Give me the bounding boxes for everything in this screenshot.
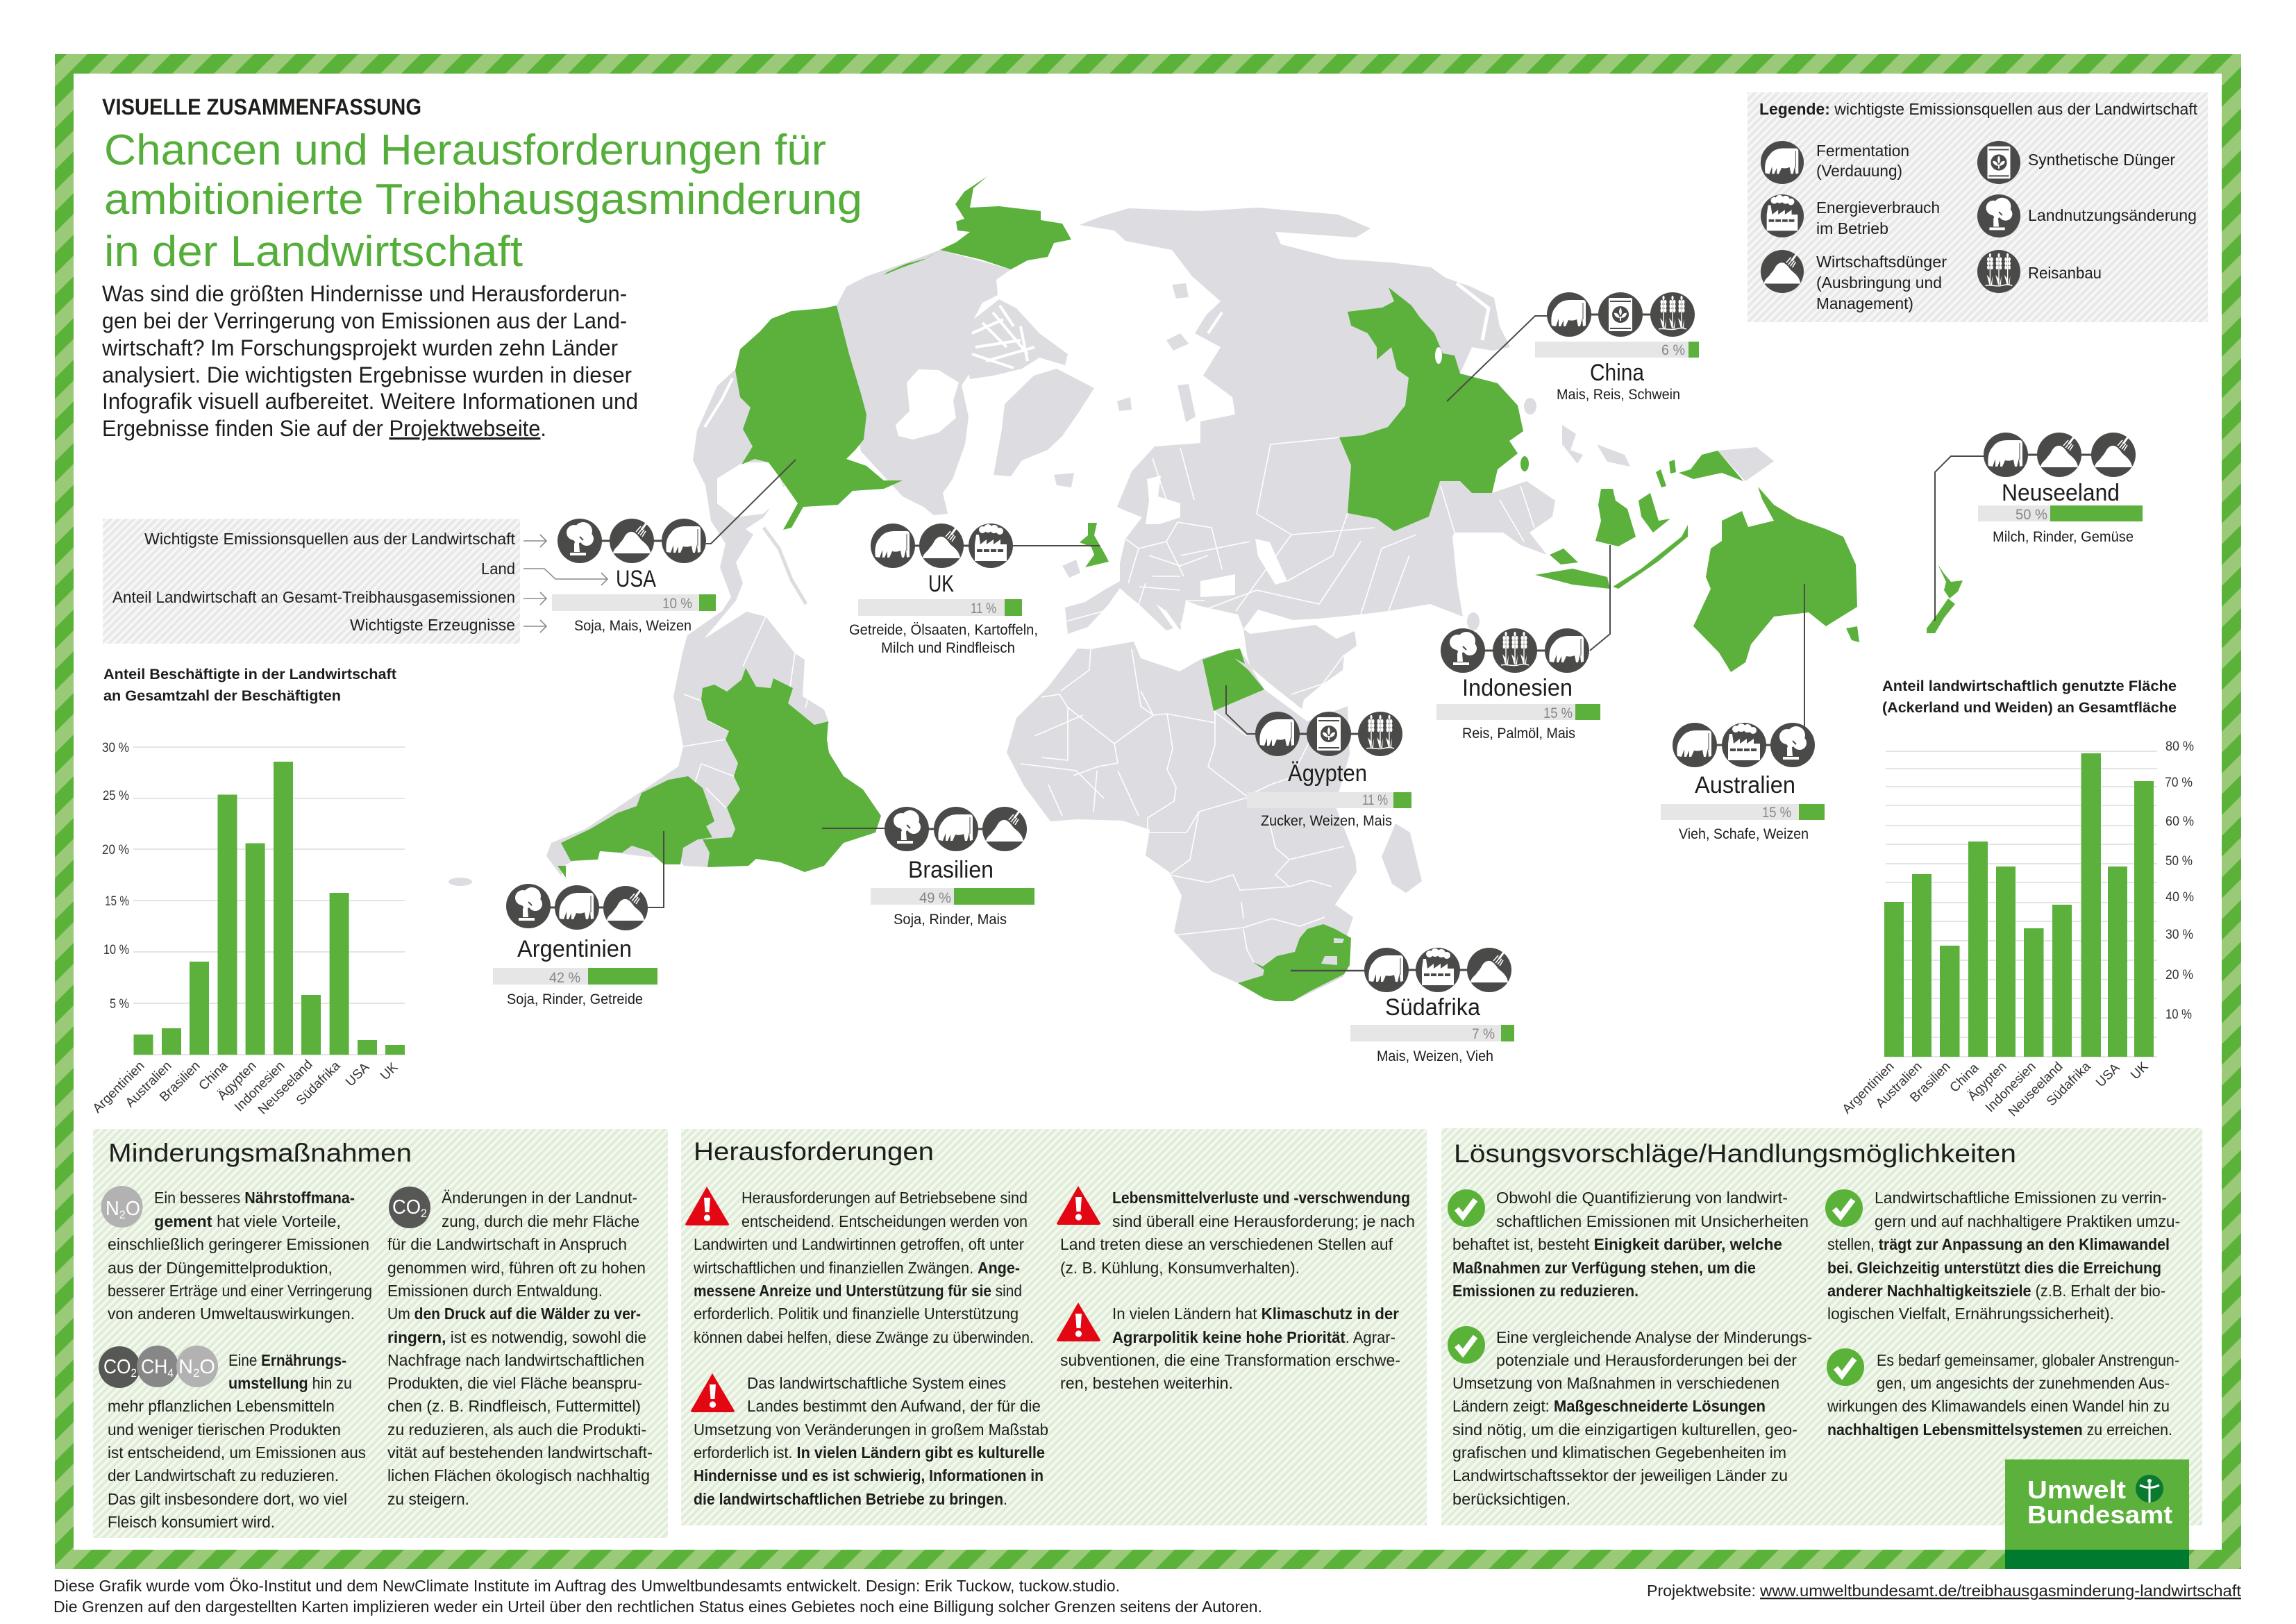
share bar: Ägypten: 11 % <box>1362 792 1388 808</box>
text block: vergleichende Analyse: Umsetzung von Maßnahmen in verschiedenen <box>1452 1374 1779 1392</box>
icon row: Neuseeland <box>1984 433 2136 477</box>
text block: Landnutzung: chen (z. B. Rindfleisch, Futtermittel) <box>387 1397 641 1415</box>
x axis labels: Südafrika <box>294 1058 344 1108</box>
text block: globale Anstrengungen <box>1827 1351 2179 1439</box>
icon: CO2 CH4 N2O <box>99 1346 218 1388</box>
y axis labels: 20 % <box>102 843 129 857</box>
icon: CO2 CH4 N2O: 2 <box>131 1366 137 1380</box>
icon: CO2: 2 <box>421 1207 427 1220</box>
y axis labels <box>2165 739 2194 1022</box>
intro text <box>101 281 638 441</box>
text block: Quantifizierung: Maßnahmen zur Verfügung stehen, um die <box>1452 1259 1756 1277</box>
label: land use change: Landnutzungsänderung <box>2028 206 2197 224</box>
heading: Visuelle Zusammenfassung: VISUELLE ZUSAMMENFASSUNG <box>102 94 421 119</box>
text block: landwirtschaftliches System: Umsetzung von Veränderungen in großem Maßstab <box>694 1421 1048 1439</box>
country: China <box>1339 287 1523 531</box>
label: energy use: im Betrieb <box>1816 219 1888 237</box>
intro text: Infografik visuell aufbereitet. Weitere Informationen und <box>102 389 638 414</box>
text block: landwirtschaftliches System: die landwirtschaftlichen Betriebe zu bringen. <box>694 1490 1007 1508</box>
share bar: Argentinien: 42 % <box>549 969 580 986</box>
text block: Klimaschutz: In vielen Ländern hat Klimaschutz in der <box>1112 1305 1399 1323</box>
text block: Nährstoffmanagement: einschließlich geringerer Emissionen <box>108 1235 369 1253</box>
text block: Betriebsebene <box>693 1189 1034 1346</box>
bars <box>1884 753 2154 1057</box>
text block: nachhaltigere Praktiken: Landwirtschaftliche Emissionen zu verrin- <box>1875 1189 2167 1207</box>
share bar: Brasilien: 49 % <box>919 889 951 906</box>
share bar: Australien <box>1661 804 1825 821</box>
icon row: Ägypten <box>1255 712 1402 756</box>
connector: Brasilien <box>822 828 889 829</box>
y axis labels: 10 % <box>2165 1007 2192 1022</box>
text block: Landnutzung: Emissionen durch Entwaldung. <box>387 1282 603 1300</box>
text block: Klimaschutz <box>1060 1305 1400 1392</box>
connector: Australien <box>1804 584 1805 728</box>
map: country borders and fine cuts <box>683 283 1534 962</box>
x axis labels: Brasilien <box>157 1059 203 1105</box>
share bar: China <box>1535 342 1699 358</box>
y axis labels <box>102 741 129 1012</box>
intro text: analysiert. Die wichtigsten Ergebnisse wurden in dieser <box>102 362 632 387</box>
logo emblem <box>2136 1475 2163 1502</box>
x axis labels: Argentinien <box>1840 1060 1897 1117</box>
country name: USA: USA <box>616 566 656 592</box>
x axis labels: China <box>1947 1060 1982 1096</box>
x axis labels: Neuseeland <box>255 1057 316 1117</box>
y axis labels: 60 % <box>2165 814 2194 829</box>
y axis labels: 10 % <box>103 943 129 957</box>
y axis labels: 30 % <box>2165 928 2193 942</box>
label: energy use: Energieverbrauch <box>1816 199 1940 217</box>
text block: Landnutzung: zung, durch die mehr Fläche <box>442 1212 639 1230</box>
text block: Landnutzung: ringern, ist es notwendig, sowohl die <box>387 1328 646 1346</box>
connector: China <box>1447 316 1548 401</box>
text block: Nährstoffmanagement: Ein besseres Nährstoffmana- <box>154 1189 355 1207</box>
products: Ägypten: Zucker, Weizen, Mais <box>1261 812 1392 829</box>
callout: UK <box>849 524 1100 656</box>
country name: UK: UK <box>928 571 954 597</box>
icon: check <box>1448 1189 1485 1227</box>
y axis labels: 50 % <box>2165 854 2193 869</box>
logo: Umweltbundesamt: Bundesamt <box>2027 1500 2172 1529</box>
icon: check <box>1448 1326 1485 1364</box>
icon: warning <box>1057 1186 1100 1225</box>
label: energy use <box>1816 199 1940 237</box>
text block: Lebensmittelverluste <box>1060 1189 1415 1277</box>
callout: USA <box>552 460 796 634</box>
icon: CO2: CO <box>392 1196 422 1219</box>
label: fermentation <box>1816 142 1909 180</box>
text block: Nährstoffmanagement: besserer Erträge und einer Verringerung <box>108 1282 372 1300</box>
icon row: Indonesien <box>1441 628 1589 673</box>
text block: Landnutzung: Änderungen in der Landnut- <box>442 1189 637 1207</box>
panel: legend <box>1748 92 2208 322</box>
map: enclaves and small inland water <box>1321 938 1344 965</box>
products: Argentinien: Soja, Rinder, Getreide <box>507 991 643 1007</box>
text block: Lebensmittelverluste: sind überall eine Herausforderung; je nach <box>1112 1212 1415 1230</box>
icon: check <box>1827 1348 1864 1386</box>
country: Brasilien <box>701 668 881 872</box>
icon: warning <box>1057 1303 1100 1341</box>
country name: Ägypten: Ägypten <box>1288 760 1367 787</box>
panel: Lösungsvorschläge <box>1441 1128 2202 1525</box>
icon: CO2 CH4 N2O: 4 <box>167 1366 174 1380</box>
y axis labels: 20 % <box>2165 968 2193 982</box>
connector: Südafrika <box>1291 970 1366 971</box>
logo: Umweltbundesamt: Umwelt <box>2027 1475 2126 1504</box>
key labels: Wichtigste Emissionsquellen aus der Landwirtschaft <box>144 530 516 548</box>
x axis labels: Südafrika <box>2044 1059 2094 1109</box>
icon: check <box>1825 1189 1863 1227</box>
panel heading: Herausforderungen <box>694 1137 934 1166</box>
country: UK <box>1080 523 1109 567</box>
chart title: employment share: an Gesamtzahl der Beschäftigten <box>103 687 341 704</box>
title: Chancen und Herausforderungen für <box>104 126 826 174</box>
map: highlighted countries <box>558 176 1963 1001</box>
x axis labels: UK <box>378 1060 401 1083</box>
text block: vergleichende Analyse: Ländern zeigt: Maßgeschneiderte Lösungen <box>1452 1397 1766 1415</box>
logo: Umweltbundesamt <box>2005 1459 2189 1569</box>
products: Australien: Vieh, Schafe, Weizen <box>1679 826 1809 842</box>
text block: Nährstoffmanagement: aus der Düngemittelproduktion, <box>108 1259 333 1277</box>
intro text: gen bei der Verringerung von Emissionen aus der Land- <box>102 308 627 333</box>
text block: Klimaschutz: Agrarpolitik keine hohe Priorität. Agrar- <box>1112 1328 1396 1346</box>
callout: Südafrika <box>1291 948 1514 1064</box>
icon: N2O: 2 <box>119 1208 126 1221</box>
share bar: Indonesien: 15 % <box>1543 705 1573 721</box>
callout: Ägypten <box>1226 685 1411 829</box>
y axis labels: 25 % <box>103 789 129 803</box>
callout: China <box>1447 292 1699 403</box>
x axis labels <box>1840 1059 2152 1119</box>
text block: Lebensmittelverluste: Land treten diese an verschiedenen Stellen auf <box>1060 1235 1393 1253</box>
products: UK: Milch und Rindfleisch <box>881 639 1015 656</box>
country: Argentinien <box>558 776 714 878</box>
icon row: Südafrika <box>1364 948 1511 992</box>
footer: credits: Diese Grafik wurde vom Öko-Institut und dem NewClimate Institute im Auftrag des Umweltbundesamts entwickelt. Design: Erik Tuckow, tuckow.studio. <box>53 1577 1120 1595</box>
products: UK: Getreide, Ölsaaten, Kartoffeln, <box>849 621 1038 638</box>
text block: Ernährungsumstellung <box>108 1351 366 1531</box>
label: manure: (Ausbringung und <box>1816 274 1942 292</box>
x axis labels: Ägypten <box>1965 1060 2010 1104</box>
share bar: USA <box>552 594 716 612</box>
text block: Ernährungsumstellung: mehr pflanzlichen Lebensmitteln <box>108 1397 335 1415</box>
country name: Brasilien: Brasilien <box>908 857 994 883</box>
x axis labels: Indonesien <box>1983 1060 2039 1115</box>
text block: Ernährungsumstellung: Eine Ernährungs- <box>228 1351 346 1369</box>
text block: Nährstoffmanagement: von anderen Umweltauswirkungen. <box>108 1305 355 1323</box>
share bar: USA: 10 % <box>662 595 692 612</box>
panel: Herausforderungen <box>681 1129 1427 1525</box>
chart title: employment share <box>103 666 396 704</box>
text block: Betriebsebene: können dabei helfen, diese Zwänge zu überwinden. <box>694 1328 1034 1346</box>
icon row: Australien <box>1673 723 1815 767</box>
icon: fermentation <box>1761 141 1804 184</box>
text block: landwirtschaftliches System: Das landwirtschaftliche System eines <box>747 1374 1006 1392</box>
text block: Landnutzung: für die Landwirtschaft in Anspruch <box>387 1235 627 1253</box>
legend heading: Legende: wichtigste Emissionsquellen aus der Landwirtschaft <box>1759 100 2198 118</box>
text block: Ernährungsumstellung: Das gilt insbesondere dort, wo viel <box>108 1490 347 1508</box>
text block: globale Anstrengungen: nachhaltigen Lebensmittelsystemen zu erreichen. <box>1827 1421 2172 1439</box>
text block: Ernährungsumstellung: der Landwirtschaft zu reduzieren. <box>108 1466 339 1484</box>
country name: China: China <box>1590 360 1644 386</box>
key labels: Land <box>481 560 515 578</box>
share bar: China: 6 % <box>1661 342 1685 358</box>
x axis labels: Australien <box>123 1059 175 1110</box>
panel heading: Minderungsmaßnahmen <box>108 1139 412 1167</box>
key labels: Anteil Landwirtschaft an Gesamt-Treibhausgasemissionen <box>112 588 515 606</box>
bars <box>133 762 405 1055</box>
share bar: Neuseeland: 50 % <box>2016 506 2047 523</box>
text block: Betriebsebene: Landwirten und Landwirtinnen getroffen, oft unter <box>694 1235 1024 1253</box>
text block: Quantifizierung: behaftet ist, besteht Einigkeit darüber, welche <box>1452 1235 1782 1253</box>
products: Brasilien: Soja, Rinder, Mais <box>894 911 1007 928</box>
y axis labels: 80 % <box>2165 739 2194 754</box>
text block: globale Anstrengungen: Es bedarf gemeinsamer, globaler Anstrengun- <box>1877 1351 2179 1369</box>
text block: vergleichende Analyse: Eine vergleichende Analyse der Minderungs- <box>1496 1328 1812 1346</box>
chart title: agricultural land share <box>1882 678 2177 716</box>
text block: Landnutzung: lichen Flächen ökologisch nachhaltig <box>387 1466 650 1484</box>
country: Ägypten <box>1203 648 1264 711</box>
footer: project website: Projektwebsite: <box>1647 1582 1756 1600</box>
text block: landwirtschaftliches System: Hindernisse und es ist schwierig, Informationen in <box>694 1466 1044 1484</box>
text block: Quantifizierung: Obwohl die Quantifizierung von landwirt- <box>1496 1189 1788 1207</box>
text block: Nährstoffmanagement <box>108 1189 372 1323</box>
products: Südafrika: Mais, Weizen, Vieh <box>1377 1048 1493 1064</box>
x axis labels: Neuseeland <box>2006 1060 2066 1119</box>
share bar: Australien: 15 % <box>1762 804 1791 821</box>
icon: CO2 <box>389 1187 430 1228</box>
x axis labels: Australien <box>1873 1060 1925 1111</box>
chart title: employment share: Anteil Beschäftigte in der Landwirtschaft <box>103 666 396 683</box>
icon row: China <box>1547 292 1695 337</box>
connector: Indonesien <box>1590 545 1610 651</box>
text block: Landnutzung: zu reduzieren, als auch die Produkti- <box>387 1421 646 1439</box>
text block: Lebensmittelverluste: (z. B. Kühlung, Konsumverhalten). <box>1060 1259 1300 1277</box>
callout: Argentinien <box>493 831 664 1007</box>
icon: warning <box>685 1187 729 1225</box>
country name: Südafrika: Südafrika <box>1385 994 1480 1021</box>
text block: Landnutzung: zu steigern. <box>387 1490 469 1508</box>
icon row: Brasilien <box>885 807 1027 851</box>
text block: Betriebsebene: entscheidend. Entscheidungen werden von <box>741 1212 1028 1230</box>
country: Südafrika <box>1238 924 1351 1001</box>
title: in der Landwirtschaft <box>104 228 523 276</box>
text block: landwirtschaftliches System: Landes bestimmt den Aufwand, der für die <box>747 1397 1041 1415</box>
text block: nachhaltigere Praktiken: stellen, trägt zur Anpassung an den Klimawandel <box>1827 1235 2170 1253</box>
text block: Betriebsebene: wirtschaftlichen und finanziellen Zwängen. Ange- <box>693 1259 1020 1277</box>
y axis labels: 30 % <box>102 741 129 755</box>
country: Indonesien <box>1535 451 1743 589</box>
arrows: key to example <box>523 535 607 633</box>
x axis labels: China <box>196 1058 231 1094</box>
text block: Quantifizierung <box>1452 1189 1809 1300</box>
text block: Quantifizierung: schaftlichen Emissionen mit Unsicherheiten <box>1496 1212 1809 1230</box>
text block: Landnutzung: genommen wird, führen oft zu hohen <box>387 1259 646 1277</box>
text block: Betriebsebene: messene Anreize und Unterstützung für sie sind <box>694 1282 1022 1300</box>
share bar: Brasilien <box>871 888 1034 906</box>
callout: Indonesien <box>1436 545 1610 742</box>
label: rice cultivation: Reisanbau <box>2028 264 2102 282</box>
label: manure: Management) <box>1816 294 1913 312</box>
title <box>104 126 862 276</box>
country: Neuseeland <box>1927 564 1963 633</box>
y axis labels: 70 % <box>2165 776 2193 790</box>
products: Indonesien: Reis, Palmöl, Mais <box>1462 725 1575 742</box>
bar chart: agricultural land share <box>1840 678 2194 1119</box>
x axis labels: UK <box>2128 1059 2152 1082</box>
callout: Brasilien <box>822 807 1034 928</box>
country name: Argentinien: Argentinien <box>517 936 632 962</box>
share bar: Argentinien <box>493 968 657 986</box>
text block: Nährstoffmanagement: gement hat viele Vorteile, <box>154 1212 341 1230</box>
key labels <box>112 530 516 634</box>
chart title: agricultural land share: (Ackerland und Weiden) an Gesamtfläche <box>1882 699 2177 716</box>
text block: Ernährungsumstellung: und weniger tierischen Produkten <box>108 1421 341 1439</box>
icon: N2O <box>101 1186 143 1228</box>
text block: Landnutzung: Produkten, die viel Fläche beanspru- <box>387 1374 642 1392</box>
label: fermentation: (Verdauung) <box>1816 162 1902 180</box>
text block: Ernährungsumstellung: ist entscheidend, um Emissionen aus <box>108 1443 366 1462</box>
label: manure <box>1816 253 1947 312</box>
label: fermentation: Fermentation <box>1816 142 1909 160</box>
text block: nachhaltigere Praktiken: logischen Vielfalt, Ernährungssicherheit). <box>1827 1305 2114 1323</box>
products: China: Mais, Reis, Schwein <box>1557 386 1680 403</box>
country: USA <box>735 176 1071 530</box>
icon: synthetic fertiliser <box>1977 141 2020 184</box>
x axis labels: Ägypten <box>215 1059 260 1103</box>
icon: CO2 CH4 N2O: O <box>199 1356 215 1378</box>
country name: Neuseeland: Neuseeland <box>2002 480 2120 506</box>
icon: CO2 CH4 N2O: N <box>178 1356 193 1378</box>
panel: how to read key <box>103 519 520 644</box>
share bar: Südafrika: 7 % <box>1472 1026 1495 1042</box>
intro text: Ergebnisse finden Sie auf der Projektwebseite. <box>102 416 546 441</box>
text block: Klimaschutz: subventionen, die eine Transformation erschwe- <box>1060 1351 1400 1369</box>
share bar: Ägypten <box>1247 792 1411 808</box>
text block: vergleichende Analyse: potenziale und Herausforderungen bei der <box>1496 1351 1797 1369</box>
text block: Quantifizierung: Emissionen zu reduzieren. <box>1452 1282 1639 1300</box>
icon row: Argentinien <box>506 884 648 930</box>
share bar: Südafrika <box>1350 1025 1514 1042</box>
x axis labels: Brasilien <box>1907 1060 1954 1105</box>
text block: vergleichende Analyse: Landwirtschaftssektor der jeweiligen Länder zu <box>1452 1466 1788 1484</box>
x axis labels: USA <box>343 1060 373 1089</box>
x axis labels: USA <box>2093 1060 2123 1090</box>
footer: credits: Die Grenzen auf den dargestellten Karten implizieren weder ein Urteil über den rechtlichen Status eines Gebietes noch eine Billigung solcher Grenzen seitens der Autoren. <box>53 1598 1262 1616</box>
country: Australien <box>1693 487 1859 672</box>
y axis labels: 40 % <box>2165 890 2194 905</box>
share bar: UK: 11 % <box>971 600 996 617</box>
world map <box>449 176 1963 1001</box>
text block: vergleichende Analyse: berücksichtigen. <box>1452 1490 1570 1508</box>
text block: nachhaltigere Praktiken: gern und auf nachhaltigere Praktiken umzu- <box>1875 1212 2180 1230</box>
x axis labels: Argentinien <box>90 1059 148 1116</box>
map: grey land masses <box>449 208 1774 1000</box>
panel heading: Lösungsvorschläge/Handlungsmöglichkeiten <box>1454 1139 2016 1168</box>
bar chart: employment share <box>90 666 405 1117</box>
intro text: wirtschaft? Im Forschungsprojekt wurden zehn Länder <box>101 335 618 360</box>
connector: UK <box>1012 545 1100 546</box>
icon: manure <box>1761 250 1804 293</box>
icon: N2O: N <box>106 1198 120 1220</box>
connector: Ägypten <box>1226 685 1257 734</box>
share bar: Neuseeland <box>1978 505 2143 523</box>
text block: Betriebsebene: Herausforderungen auf Betriebsebene sind <box>741 1189 1028 1207</box>
connector: Neuseeland <box>1935 456 1985 621</box>
icon: CO2 CH4 N2O: CO <box>103 1356 133 1378</box>
text block: globale Anstrengungen: wirkungen des Klimawandels einen Wandel hin zu <box>1827 1397 2170 1415</box>
map: inland sea in China <box>1435 347 1442 364</box>
chart title: agricultural land share: Anteil landwirtschaftlich genutzte Fläche <box>1882 678 2177 694</box>
icon: CO2 CH4 N2O: 2 <box>193 1366 199 1380</box>
label: manure: Wirtschaftsdünger <box>1816 253 1947 271</box>
intro text: Was sind die größten Hindernisse und Herausforderun- <box>102 281 627 306</box>
text block: nachhaltigere Praktiken <box>1827 1189 2180 1323</box>
text block: Landnutzung: Um den Druck auf die Wälder zu ver- <box>387 1305 641 1323</box>
icon: N2O: O <box>126 1198 140 1220</box>
footer: credits <box>53 1577 1262 1616</box>
icon: land use change <box>1977 194 2020 237</box>
text block: nachhaltigere Praktiken: anderer Nachhaltigkeitsziele (z.B. Erhalt der bio- <box>1827 1282 2165 1300</box>
panel: Minderungsmaßnahmen <box>93 1129 668 1538</box>
products: UK <box>849 621 1038 656</box>
footer: project website: www.umweltbundesamt.de/treibhausgasminderung-landwirtschaft <box>1759 1582 2242 1600</box>
label: synthetic fertiliser: Synthetische Dünger <box>2028 151 2175 169</box>
text block: globale Anstrengungen: gen, um angesichts der zunehmenden Aus- <box>1877 1374 2170 1392</box>
text block: vergleichende Analyse: grafischen und klimatischen Gegebenheiten im <box>1452 1443 1786 1462</box>
icon row: UK <box>871 524 1013 568</box>
y axis labels: 15 % <box>105 894 129 909</box>
icon: energy use <box>1761 194 1804 237</box>
text block: Lebensmittelverluste: Lebensmittelverluste und -verschwendung <box>1112 1189 1410 1207</box>
text block: landwirtschaftliches System: erforderlich ist. In vielen Ländern gibt es kulturelle <box>694 1443 1045 1462</box>
icon: CO2 CH4 N2O: CH <box>141 1356 170 1378</box>
callout: Australien <box>1661 584 1825 842</box>
text block: Ernährungsumstellung: Fleisch konsumiert wird. <box>108 1513 275 1531</box>
icon: warning <box>691 1373 735 1412</box>
title: ambitionierte Treibhausgasminderung <box>104 176 862 224</box>
share bar: Indonesien <box>1436 704 1600 721</box>
text block: Landnutzung <box>387 1189 653 1508</box>
callout: Neuseeland <box>1935 433 2143 621</box>
icon row: USA <box>558 519 706 563</box>
text block: Ernährungsumstellung: umstellung hin zu <box>228 1374 352 1392</box>
country name: Australien: Australien <box>1695 772 1795 798</box>
country name: Indonesien: Indonesien <box>1462 675 1573 701</box>
y axis labels: 5 % <box>110 997 129 1012</box>
share bar: UK <box>858 599 1022 617</box>
connector: Argentinien <box>648 831 664 907</box>
key labels: Wichtigste Erzeugnisse <box>350 616 515 634</box>
text block: Landnutzung: vität auf bestehenden landwirtschaft- <box>387 1443 653 1462</box>
text block: landwirtschaftliches System <box>694 1374 1048 1508</box>
x axis labels <box>90 1057 401 1117</box>
text block: Betriebsebene: erforderlich. Politik und finanzielle Unterstützung <box>694 1305 1019 1323</box>
products: Neuseeland: Milch, Rinder, Gemüse <box>1993 528 2134 545</box>
text block: vergleichende Analyse <box>1452 1328 1812 1508</box>
text block: Klimaschutz: ren, bestehen weiterhin. <box>1060 1374 1233 1392</box>
connector: USA <box>706 460 796 544</box>
icon: rice cultivation <box>1977 250 2020 293</box>
text block: nachhaltigere Praktiken: bei. Gleichzeitig unterstützt dies die Erreichung <box>1827 1259 2161 1277</box>
x axis labels: Indonesien <box>232 1059 288 1114</box>
map: white water bodies and coast cuts <box>717 369 1287 597</box>
text block: vergleichende Analyse: sind nötig, um die einzigartigen kulturellen, geo- <box>1452 1421 1798 1439</box>
text block: Landnutzung: Nachfrage nach landwirtschaftlichen <box>387 1351 644 1369</box>
products: USA: Soja, Mais, Weizen <box>574 617 692 634</box>
